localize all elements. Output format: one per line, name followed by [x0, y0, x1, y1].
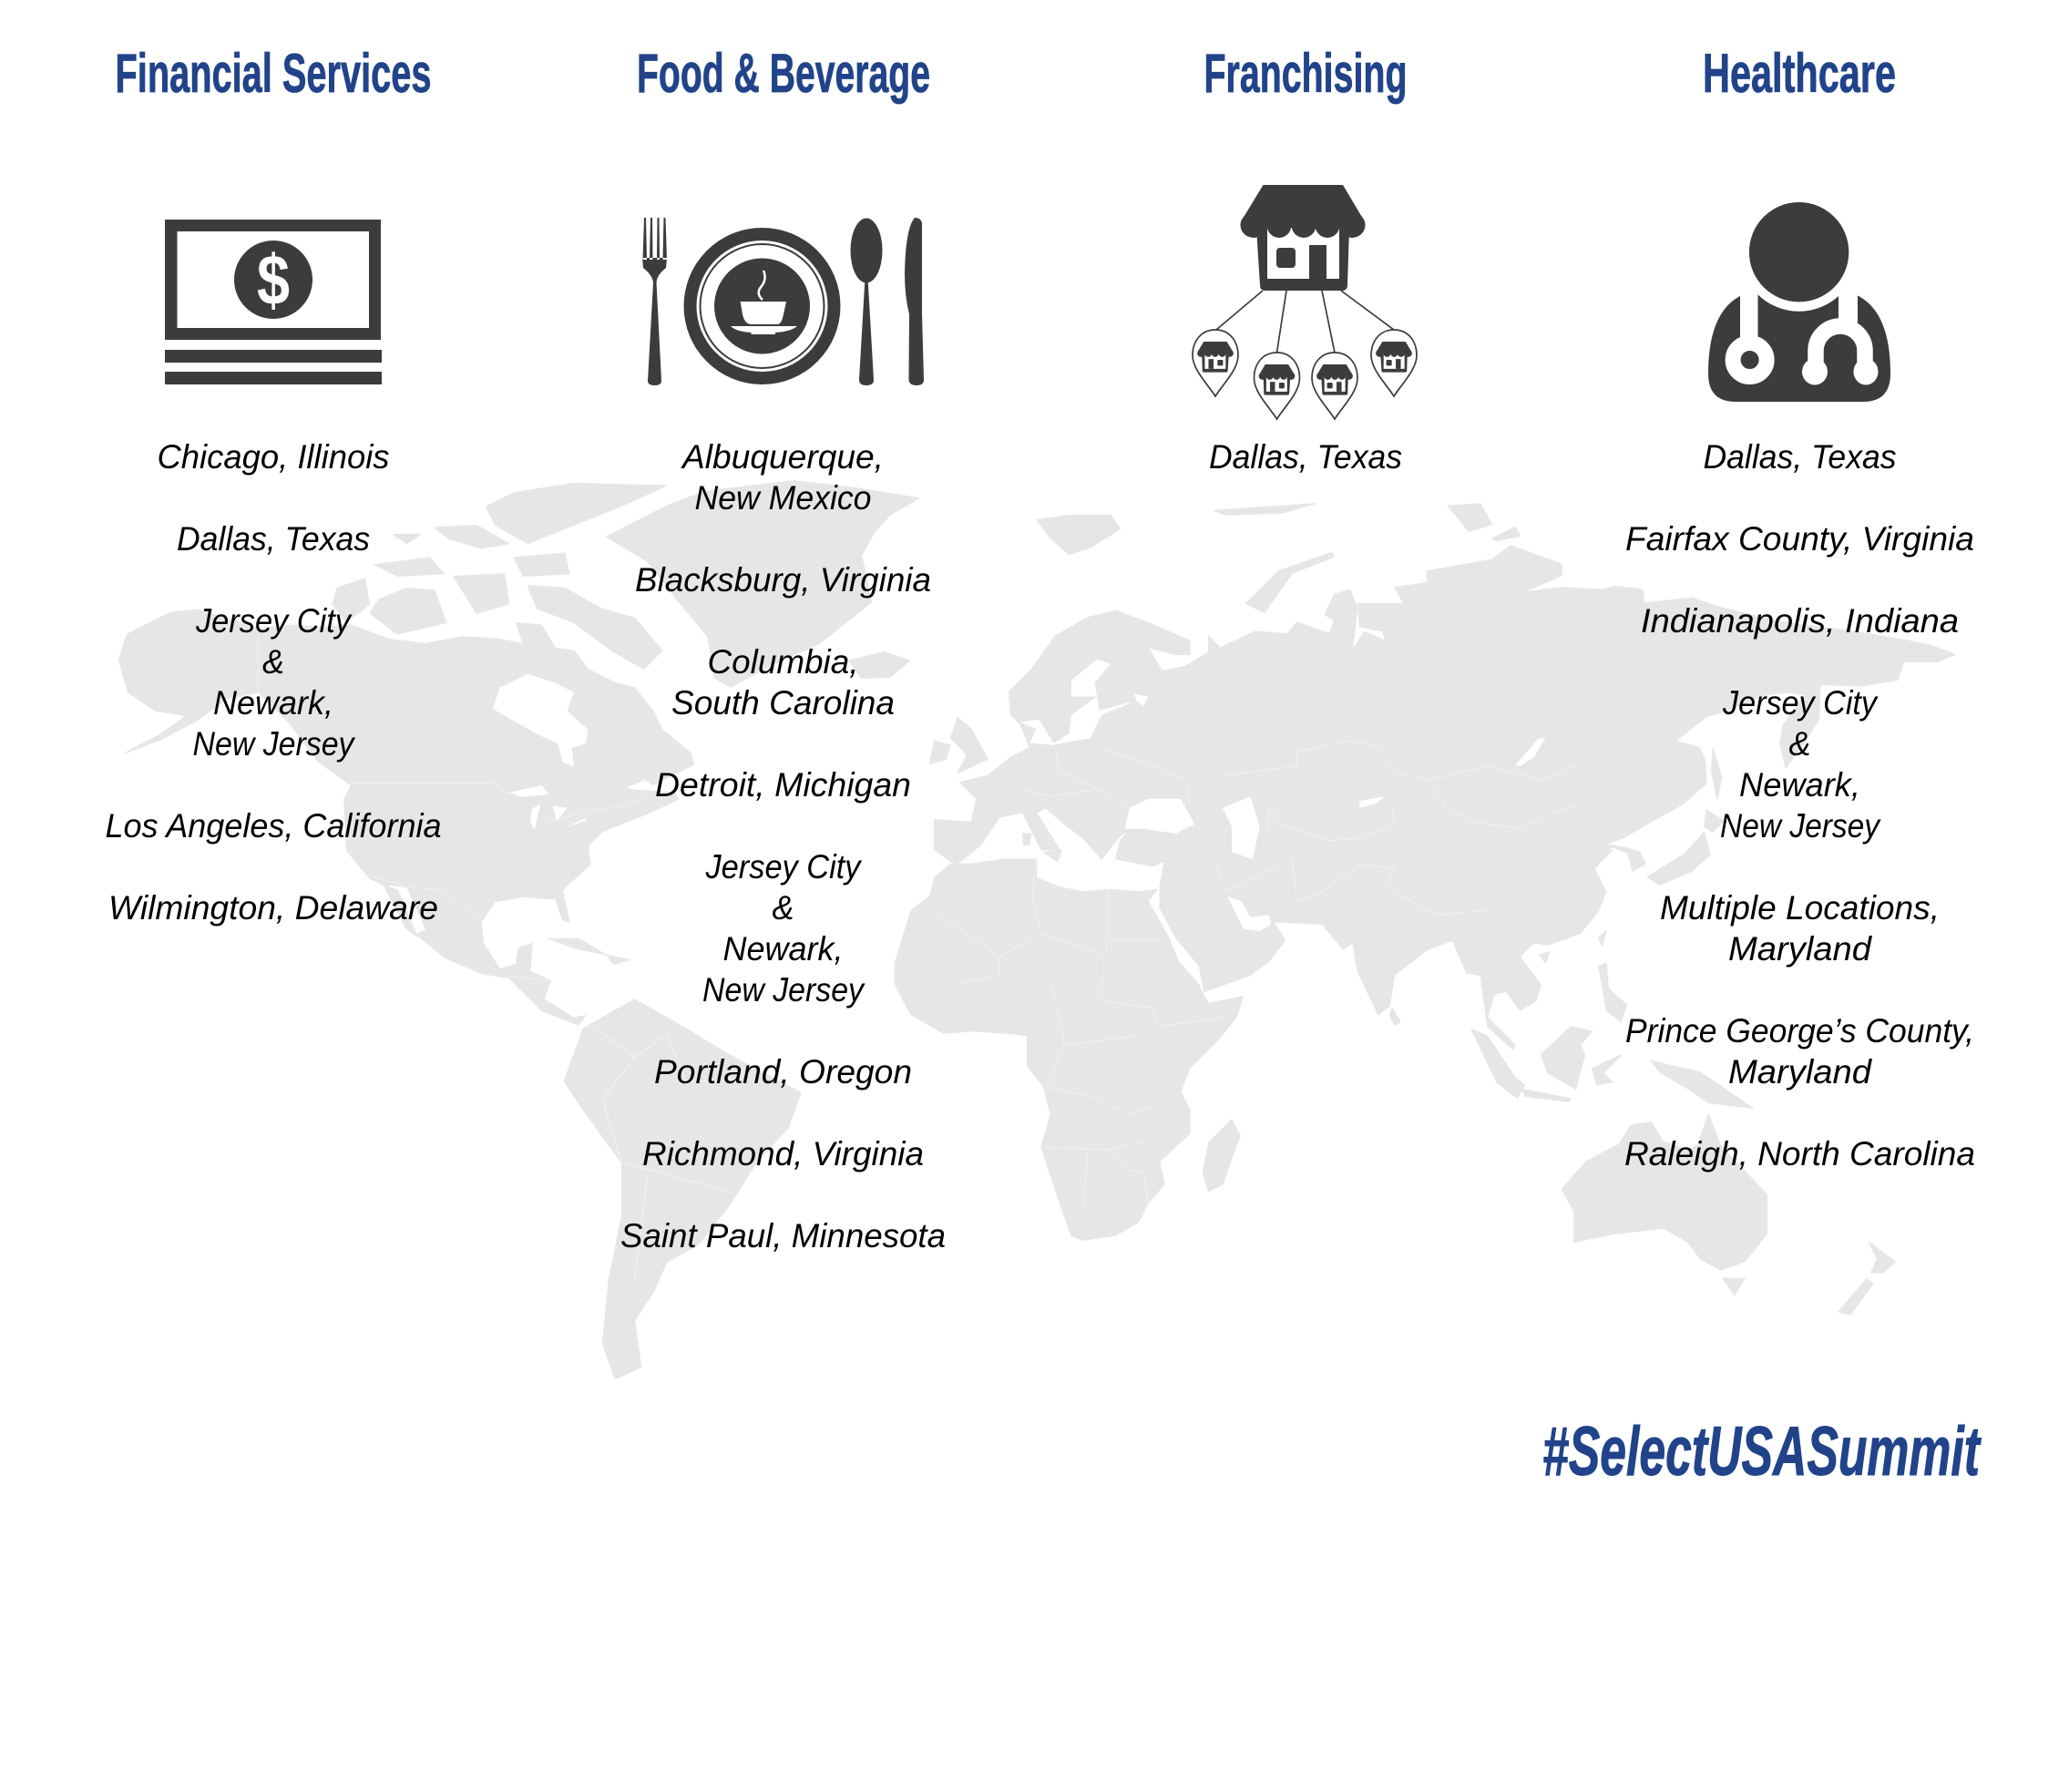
city list: Los Angeles, California [106, 807, 441, 845]
city list: Columbia, [707, 643, 858, 681]
city list: Portland, Oregon [654, 1053, 912, 1091]
heading: Franchising [1204, 43, 1407, 104]
city list: Newark, [1739, 766, 1860, 804]
panel: Financial Services [106, 43, 441, 927]
Eurasia [935, 546, 1654, 1050]
inland seas and gulfs [1125, 799, 1194, 834]
city list: Maryland [1728, 1053, 1872, 1091]
city list: Saint Paul, Minnesota [620, 1217, 946, 1254]
spoon [851, 219, 882, 282]
heading: Healthcare [1703, 43, 1896, 104]
city list: & [262, 643, 284, 681]
city list: & [773, 889, 794, 927]
Greenland and Iceland [607, 481, 919, 687]
panel: Healthcare [1624, 43, 1975, 1172]
fork [642, 218, 667, 385]
city list: Wilmington, Delaware [108, 889, 438, 927]
city list: Chicago, Illinois [157, 438, 390, 476]
city list: New Jersey [193, 725, 356, 763]
panel: Franchising [1193, 43, 1417, 476]
city list: Dallas, Texas [1209, 438, 1402, 476]
city list: Blacksburg, Virginia [635, 561, 931, 599]
city list: Newark, [723, 930, 844, 968]
knife [905, 218, 924, 385]
panel: Food & Beverage [620, 43, 946, 1254]
city list [620, 438, 946, 1254]
city list: Raleigh, North Carolina [1624, 1135, 1975, 1172]
icon: plate with cup, fork, spoon and knife [642, 218, 924, 385]
city list: Indianapolis, Indiana [1641, 602, 1959, 640]
islands [950, 717, 988, 773]
city list: Prince George’s County, [1625, 1012, 1974, 1050]
world map background [118, 481, 1956, 1379]
city list: New Jersey [702, 971, 865, 1009]
city list: Jersey City [195, 602, 353, 640]
icon: banknote stack [165, 220, 382, 384]
city list: New Jersey [1720, 807, 1881, 845]
city list: & [1789, 725, 1811, 763]
city list: Jersey City [1722, 684, 1879, 722]
Australia [1562, 1114, 1767, 1270]
heading: Financial Services [115, 43, 432, 104]
Africa [895, 859, 1244, 1240]
city list: New Mexico [694, 479, 871, 517]
city list [106, 438, 441, 927]
city list: Albuquerque, [681, 438, 884, 476]
city list: Richmond, Virginia [642, 1135, 924, 1172]
city list: Maryland [1728, 930, 1872, 968]
Russian Far East, Kamchatka and Korea [1576, 586, 1956, 872]
city list: Jersey City [705, 848, 863, 886]
heading: Food & Beverage [637, 43, 930, 104]
city list: Fairfax County, Virginia [1625, 520, 1974, 558]
city list [1624, 438, 1975, 1172]
city list: Dallas, Texas [177, 520, 370, 558]
city list: Dallas, Texas [1704, 438, 1897, 476]
city list: South Carolina [671, 684, 895, 722]
city list: Detroit, Michigan [655, 766, 911, 804]
city list: Multiple Locations, [1660, 889, 1940, 927]
icon: doctor with stethoscope [1708, 193, 1890, 402]
icon: shop connected to four location pins [1193, 185, 1417, 419]
city list: Newark, [213, 684, 333, 722]
icon: banknote stack: $ [257, 240, 290, 320]
